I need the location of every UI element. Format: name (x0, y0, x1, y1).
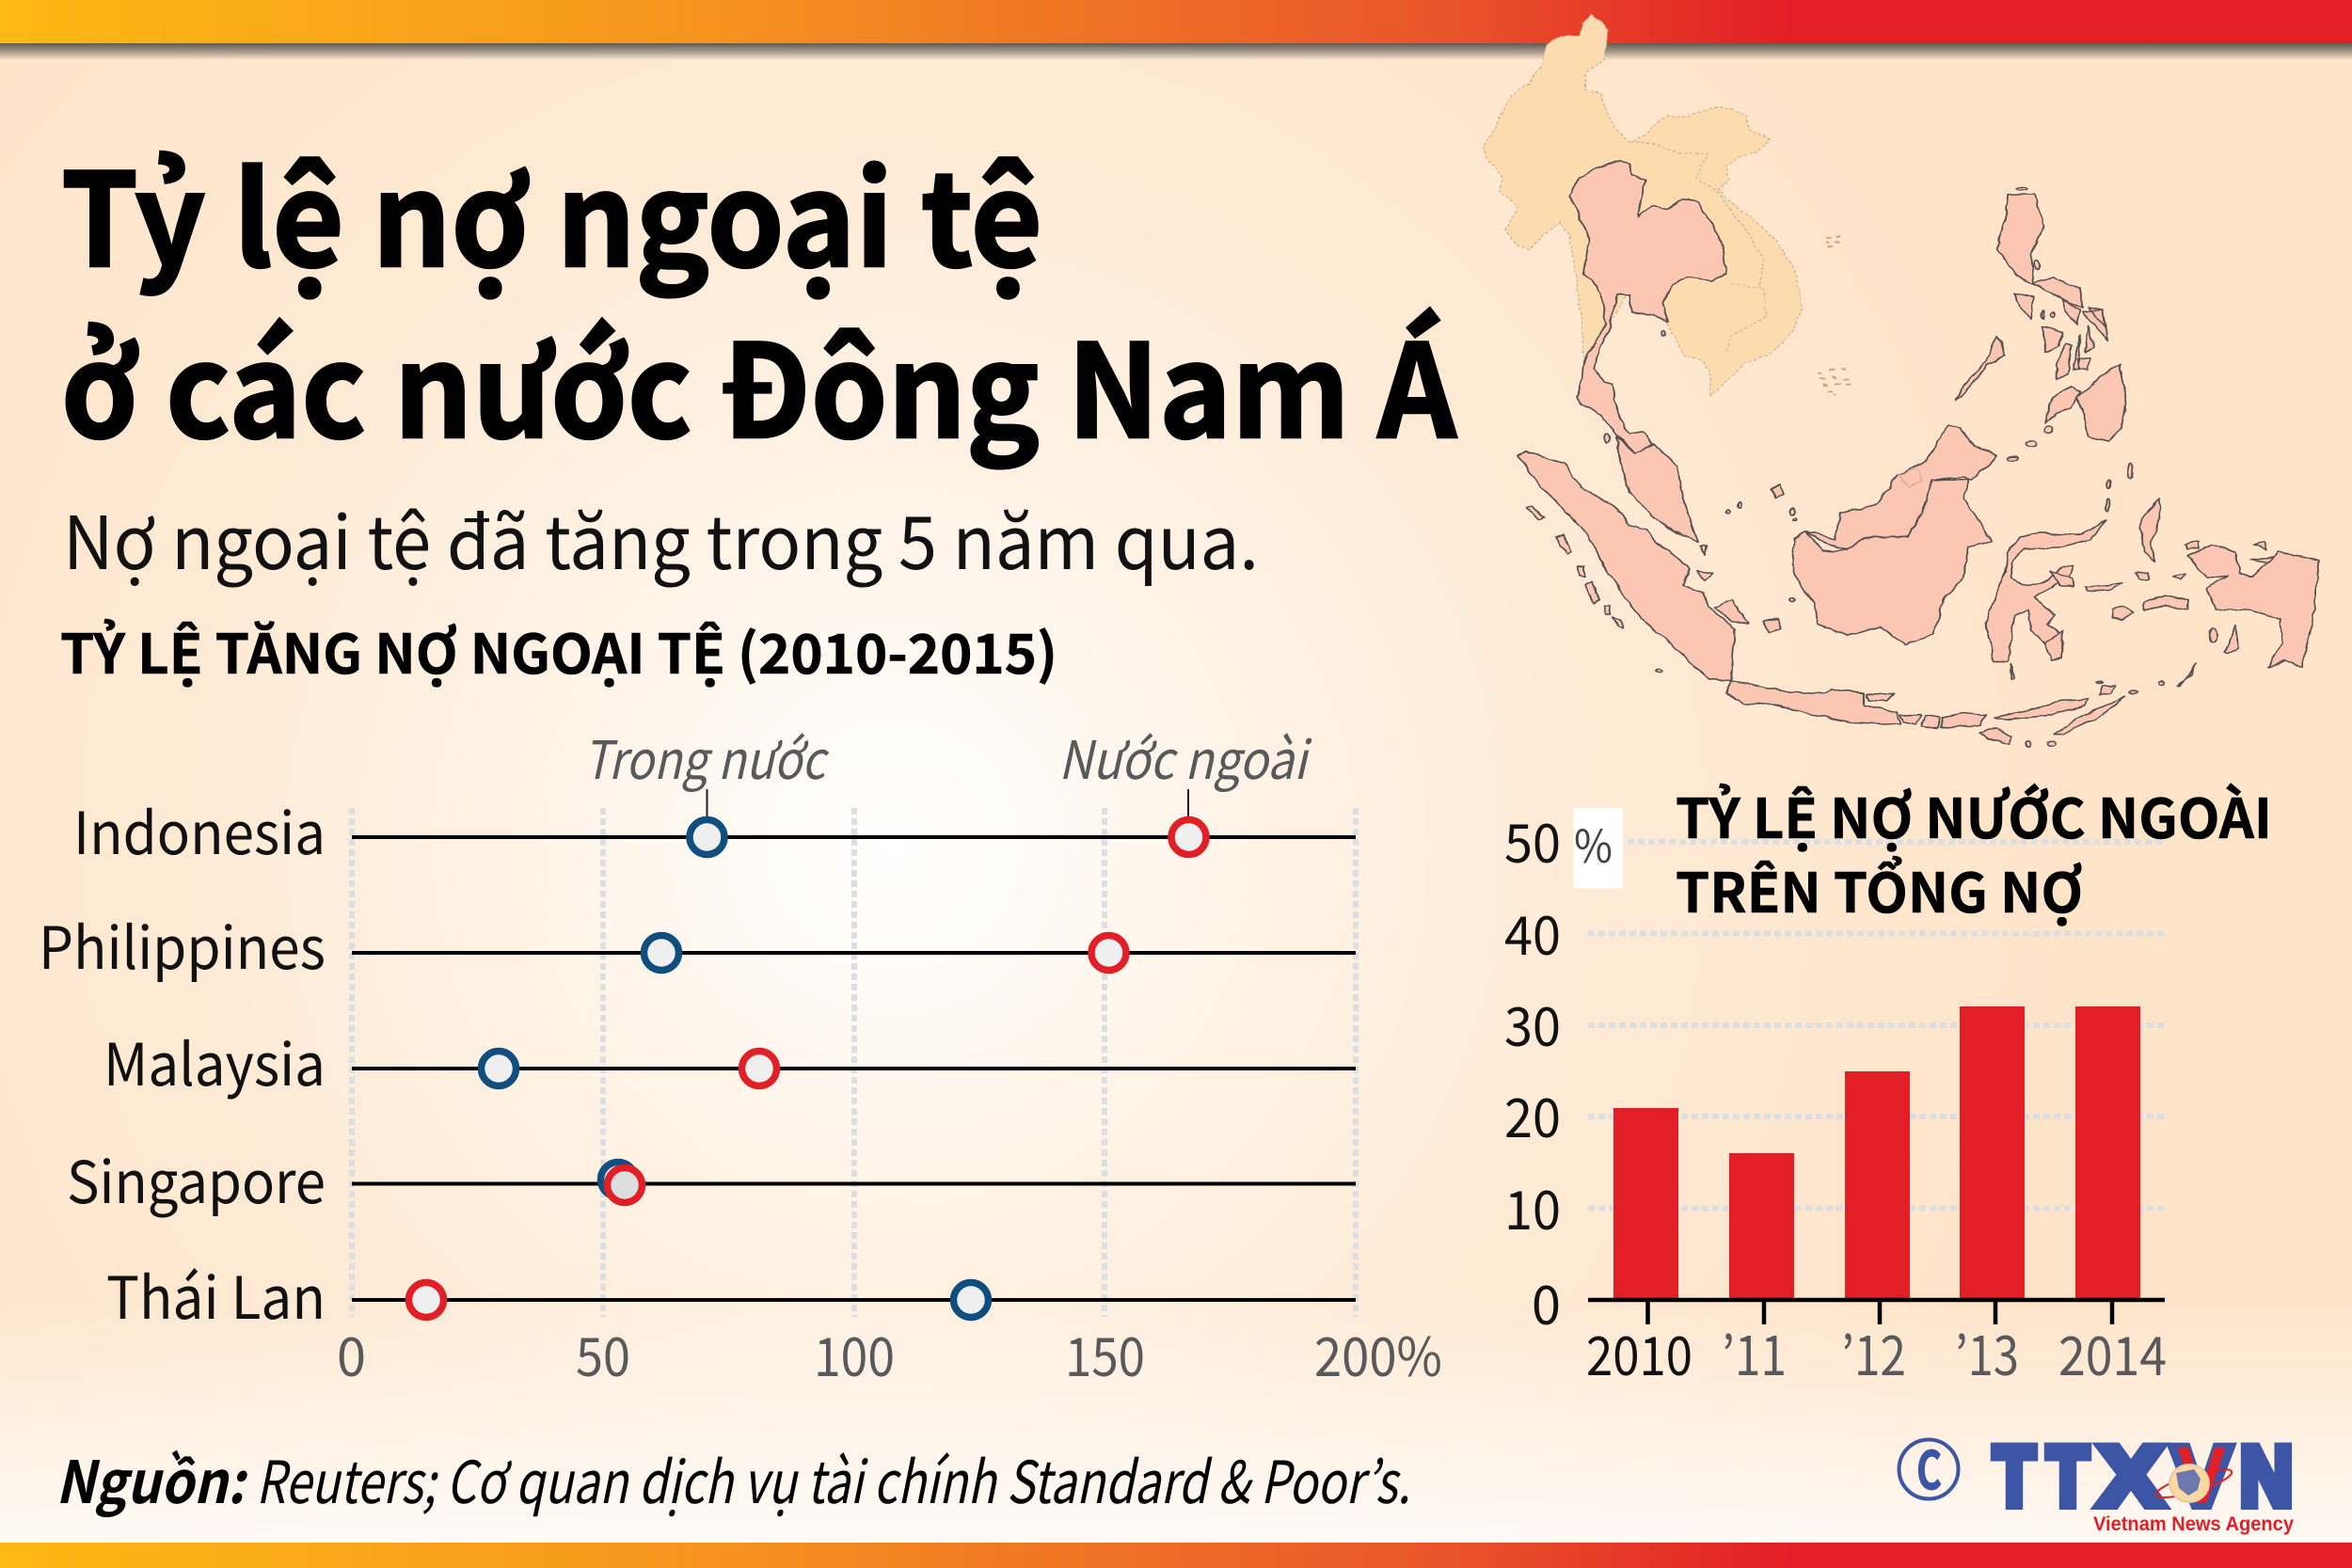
subtitle: Nợ ngoại tệ đã tăng trong 5 năm qua. (63, 485, 1259, 591)
legend labels (583, 719, 1312, 795)
y axis labels (1504, 801, 1561, 1340)
Papua (2188, 545, 2319, 667)
x axis labels (1586, 1314, 2167, 1391)
bottom colour band (0, 1543, 2352, 1568)
dot plot: debt growth by country (39, 719, 1442, 1392)
row lines (352, 837, 1356, 1300)
top colour band (0, 0, 2352, 60)
x axis labels: 150 (1065, 1315, 1145, 1392)
markers: foreign (408, 820, 1206, 1317)
Malaysia peninsula (1616, 437, 1699, 543)
bar chart: foreign debt share (1504, 775, 2272, 1391)
x axis labels: ’12 (1841, 1314, 1906, 1391)
axis and ticks (1588, 1300, 2165, 1324)
chart title: TỶ LỆ NỢ NƯỚC NGOÀI (1676, 775, 2272, 854)
map: highlighted countries (1518, 161, 2319, 747)
x axis labels: 2010 (1586, 1314, 1692, 1391)
left chart heading: TỶ LỆ TĂNG NỢ NGOẠI TỆ (2010-2015) (60, 610, 1057, 689)
Sumatra outer islands and small islands (1527, 484, 2074, 679)
logo: TTXVN: V (2172, 1429, 2231, 1523)
copyright mark (1899, 1429, 1959, 1505)
x axis labels (337, 1315, 1442, 1392)
title: ở các nước Đông Nam Á (61, 289, 1457, 475)
title (61, 118, 1457, 475)
Indonesian Borneo (1791, 480, 1992, 645)
logo: Vietnam News Agency: Vietnam News Agency (2093, 1513, 2294, 1535)
legend labels: Nước ngoài (1058, 719, 1312, 795)
logo: TTXVN: T (2047, 1429, 2089, 1523)
logo: TTXVN: T (1994, 1429, 2035, 1523)
y axis labels: 10 (1504, 1168, 1561, 1245)
legend labels: Trong nước (583, 719, 830, 795)
legend leader lines (707, 789, 1188, 818)
logo: red V: V (2177, 1431, 2226, 1519)
y axis labels: 30 (1504, 985, 1561, 1062)
chart title: TRÊN TỔNG NỢ (1676, 849, 2083, 928)
Sulawesi (1985, 521, 2106, 662)
markers: domestic (482, 820, 988, 1317)
source line: Reuters; Cơ quan dịch vụ tài chính Standard & Poor’s. (256, 1435, 1410, 1520)
x axis labels: 2014 (2058, 1314, 2167, 1391)
country labels: Singapore (67, 1135, 326, 1220)
map of Southeast Asia (1482, 14, 2319, 747)
country labels: Thái Lan (106, 1251, 326, 1336)
Sumatra (1518, 452, 1735, 680)
country labels: Malaysia (103, 1018, 326, 1102)
x axis labels: 0 (337, 1315, 366, 1392)
horizontal gridlines (1588, 842, 2165, 1208)
vertical gridlines (352, 808, 1356, 1317)
x axis labels: ’11 (1722, 1314, 1787, 1391)
copyright mark: C (1916, 1429, 1942, 1505)
y axis labels: 20 (1504, 1076, 1561, 1153)
logo: TTXVN (1994, 1429, 2294, 1535)
percent unit box: % (1574, 810, 1613, 876)
Malaysian Borneo (1806, 425, 1997, 549)
Maluku (2085, 499, 2273, 687)
bars (1613, 1006, 2140, 1300)
x axis labels: 50 (576, 1315, 630, 1392)
country labels (39, 786, 326, 1336)
Lesser Sunda islands (1866, 686, 2125, 744)
map: paracel and spratly islands (1818, 236, 1851, 394)
logo: TTXVN: X (2099, 1429, 2163, 1523)
y axis labels: 40 (1504, 894, 1561, 971)
country labels: Indonesia (73, 786, 326, 871)
Philippines (1957, 195, 2126, 441)
logo: TTXVN: N (2240, 1429, 2293, 1523)
map: non-highlighted mainland countries (1482, 14, 1802, 397)
source line: Nguồn: (56, 1435, 247, 1520)
x axis labels: 200% (1314, 1315, 1442, 1392)
y axis labels: 50 (1504, 801, 1561, 879)
logo: globe and orbit (2153, 1464, 2234, 1503)
Thailand (1569, 161, 1726, 455)
country labels: Philippines (39, 901, 326, 986)
chart title (1676, 775, 2272, 928)
y axis labels: 0 (1532, 1263, 1561, 1340)
x axis labels: 100 (814, 1315, 895, 1392)
percent unit box (1573, 808, 1623, 888)
x axis labels: ’13 (1955, 1314, 2019, 1391)
map: internal mainland borders (1629, 142, 1766, 353)
map: Brunei (1899, 467, 1923, 487)
title: Tỷ lệ nợ ngoại tệ (61, 118, 1042, 304)
Java (1726, 681, 1900, 724)
